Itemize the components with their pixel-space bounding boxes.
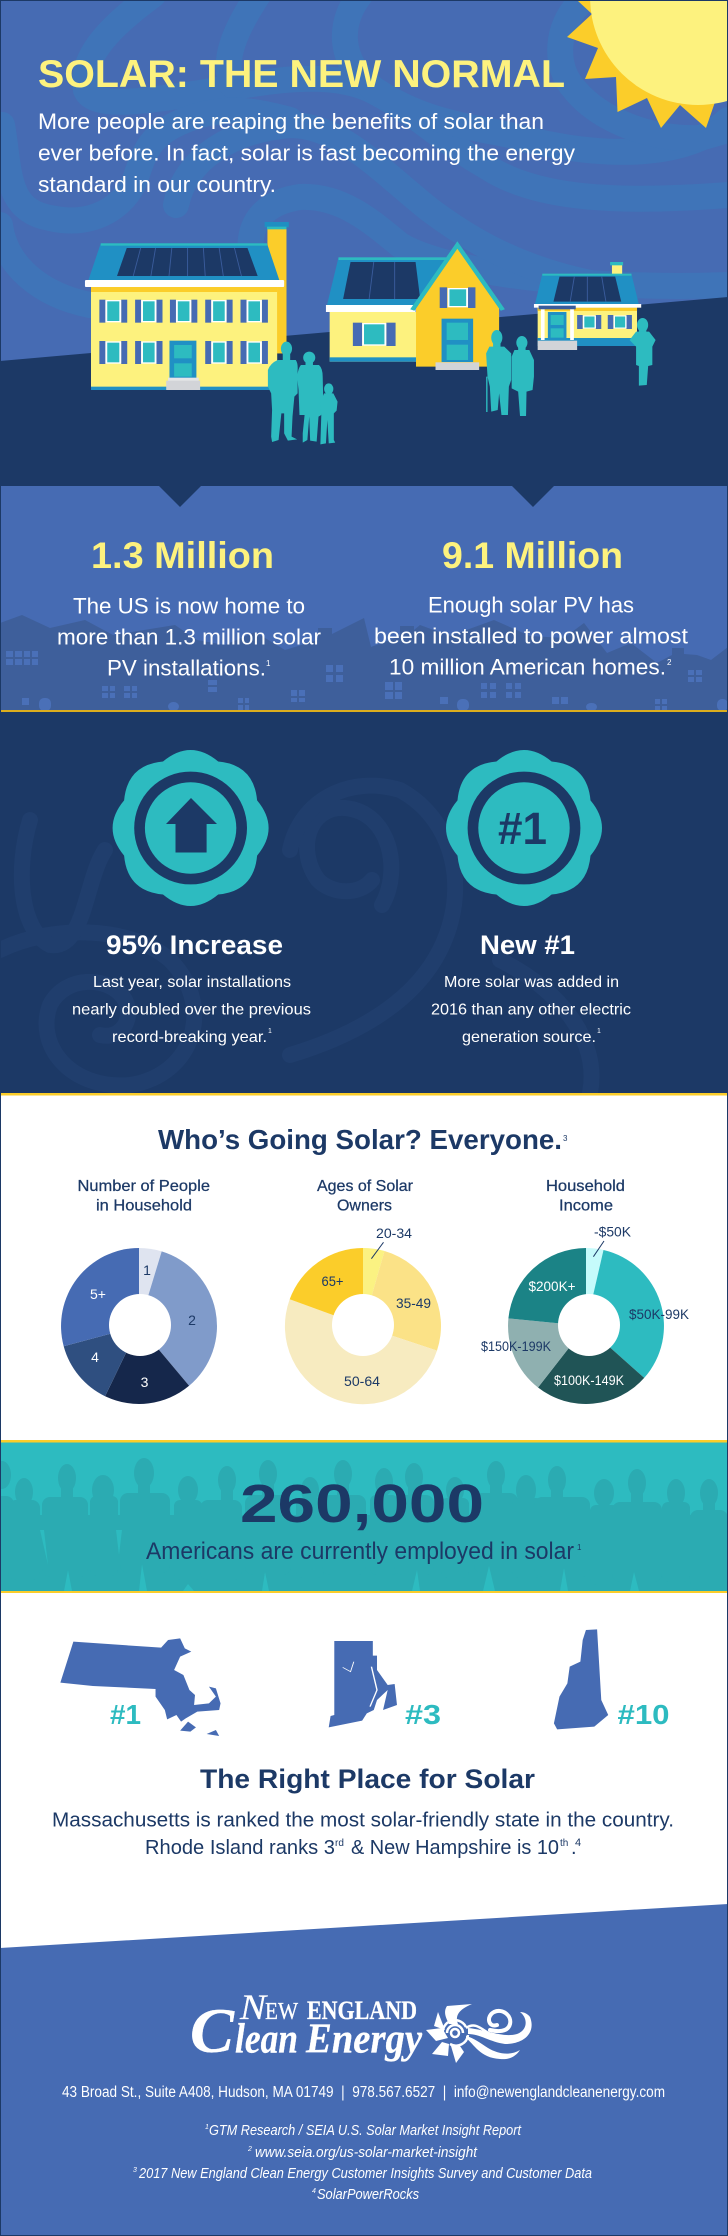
references: SolarPowerRocks bbox=[317, 2187, 419, 2203]
map: Massachusetts bbox=[60, 1638, 221, 1736]
stat: 1.3 Million: The US is now home to bbox=[73, 594, 305, 618]
illustration: houses and people bbox=[85, 222, 656, 444]
references: GTM Research / SEIA U.S. Solar Market Insight Report bbox=[209, 2123, 522, 2139]
stat: 1.3 Million: 1 bbox=[266, 659, 271, 668]
map: Rhode Island bbox=[329, 1641, 397, 1727]
text: new number one: More solar was added in bbox=[444, 974, 619, 991]
caption: Americans are currently employed in solar bbox=[146, 1538, 574, 1565]
intro text: ever before. In fact, solar is fast becoming the energy bbox=[38, 140, 576, 166]
badge: number one bbox=[446, 750, 602, 906]
stat: 9.1 Million: 10 million American homes. bbox=[389, 654, 666, 680]
map: New Hampshire bbox=[554, 1629, 608, 1729]
body text: Massachusetts is ranked the most solar-friendly state in the country. bbox=[52, 1810, 674, 1832]
people: woman bbox=[630, 318, 656, 386]
text: new number one: New #1 bbox=[480, 930, 575, 960]
gaps between figures bbox=[40, 1530, 639, 1591]
intro text: standard in our country. bbox=[38, 172, 276, 197]
crowd silhouette bbox=[0, 1458, 728, 1591]
body text: th bbox=[560, 1838, 568, 1849]
references: 2017 New England Clean Energy Customer Insights Survey and Customer Data bbox=[138, 2166, 592, 2182]
heading: The Right Place for Solar bbox=[200, 1764, 536, 1794]
references: 3 bbox=[133, 2167, 137, 2174]
donut: number of people in household: 2 bbox=[188, 1312, 196, 1328]
badge: number one: #1 bbox=[498, 803, 547, 854]
sky swirls bbox=[0, 0, 728, 305]
logo wordmark: N bbox=[239, 1987, 268, 2027]
logo wordmark: ENGLAND bbox=[307, 1996, 417, 2025]
panel: jobs band bbox=[0, 1440, 728, 1594]
donut: number of people in household: in Household bbox=[96, 1198, 192, 1214]
stat: 1.3 Million: PV installations. bbox=[107, 656, 266, 680]
body text: rd bbox=[335, 1838, 344, 1849]
donut: household income: Income bbox=[559, 1198, 613, 1214]
donut: household income: $200K+ bbox=[528, 1278, 576, 1294]
stat: 1.3 Million: more than 1.3 million solar bbox=[57, 624, 321, 650]
references: 1 bbox=[205, 2124, 209, 2131]
text: new number one: 1 bbox=[597, 1028, 601, 1035]
panel: who's going solar bbox=[0, 1093, 728, 1441]
text: 95% increase: nearly doubled over the previous bbox=[72, 1002, 311, 1018]
donut: household income: $150K-199K bbox=[481, 1338, 552, 1354]
body text: Rhode Island ranks 3 bbox=[145, 1837, 335, 1859]
rank labels: #3 bbox=[405, 1699, 441, 1730]
intro text: More people are reaping the benefits of solar than bbox=[38, 109, 544, 134]
logo wordmark: C bbox=[190, 1995, 235, 2066]
background swirls bbox=[0, 786, 592, 1093]
donut: ages of solar owners bbox=[285, 1178, 441, 1404]
skyline bbox=[0, 615, 728, 711]
house: large colonial bbox=[85, 222, 289, 390]
text: 95% increase: record-breaking year. bbox=[112, 1029, 267, 1046]
gold rules bbox=[0, 1440, 728, 1594]
people: older couple bbox=[486, 330, 534, 416]
stat: 9.1 Million: been installed to power almost bbox=[374, 624, 688, 648]
logo wordmark: lean bbox=[235, 2016, 298, 2062]
references: 4 bbox=[312, 2188, 316, 2195]
donut: ages of solar owners: 35-49 bbox=[396, 1295, 431, 1311]
body text: . bbox=[571, 1837, 577, 1859]
logo wordmark bbox=[190, 1987, 422, 2066]
sun bbox=[567, 0, 728, 128]
references: 2 bbox=[247, 2146, 252, 2153]
people: family of three bbox=[268, 342, 338, 444]
donut: number of people in household: Number of People bbox=[78, 1178, 210, 1195]
rank labels: #10 bbox=[618, 1699, 670, 1730]
donut: ages of solar owners: 20-34 bbox=[376, 1225, 412, 1241]
badge: arrow up bbox=[113, 750, 269, 906]
text: 95% increase: 95% Increase bbox=[106, 930, 283, 960]
big number: 260,000 bbox=[240, 1474, 484, 1534]
donut: number of people in household: 4 bbox=[91, 1349, 99, 1365]
panel: hero bbox=[0, 0, 728, 487]
stat: 9.1 Million: Enough solar PV has bbox=[428, 592, 634, 618]
heading footnote: 3 bbox=[563, 1134, 568, 1143]
donut: number of people in household: 5+ bbox=[90, 1286, 106, 1302]
house: gabled bbox=[326, 245, 503, 370]
text: new number one bbox=[431, 930, 631, 1046]
text: 95% increase bbox=[72, 930, 311, 1046]
stat: 9.1 Million: 9.1 Million bbox=[442, 535, 623, 576]
panel: growth highlights bbox=[0, 712, 728, 1093]
ground bbox=[0, 297, 728, 487]
donut: household income: -$50K bbox=[594, 1224, 632, 1240]
donut: ages of solar owners: 50-64 bbox=[344, 1373, 380, 1389]
donut: household income: $100K-149K bbox=[554, 1372, 625, 1388]
donut: number of people in household: 1 bbox=[143, 1262, 151, 1278]
references: www.seia.org/us-solar-market-insight bbox=[255, 2145, 478, 2161]
stat: 1.3 Million: 1.3 Million bbox=[91, 535, 274, 576]
donut: ages of solar owners: Ages of Solar bbox=[317, 1178, 414, 1195]
house: small cottage bbox=[534, 262, 641, 350]
logo wordmark: Energy bbox=[305, 2016, 422, 2062]
rank labels bbox=[110, 1699, 670, 1730]
donut: ages of solar owners: 65+ bbox=[322, 1273, 344, 1289]
panel: state rankings bbox=[0, 1593, 728, 1948]
text: 95% increase: Last year, solar installations bbox=[93, 974, 291, 991]
gold rule bbox=[0, 710, 728, 712]
intro text bbox=[38, 109, 576, 197]
donut: number of people in household: 3 bbox=[141, 1374, 149, 1390]
references bbox=[133, 2123, 592, 2203]
callout notches bbox=[159, 486, 554, 507]
caption footnote: 1 bbox=[577, 1543, 582, 1552]
rank labels: #1 bbox=[110, 1699, 141, 1730]
logo swirl mark bbox=[426, 2004, 532, 2063]
donut: household income bbox=[481, 1178, 690, 1404]
title: SOLAR: THE NEW NORMAL bbox=[38, 53, 565, 96]
text: new number one: generation source. bbox=[462, 1029, 596, 1046]
stat: 1.3 Million bbox=[57, 535, 321, 680]
text: new number one: 2016 than any other electric bbox=[431, 1002, 631, 1018]
body text: & New Hampshire is 10 bbox=[351, 1837, 559, 1859]
stat: 9.1 Million bbox=[374, 535, 688, 680]
panel: installation stats bbox=[0, 486, 728, 712]
donut: ages of solar owners: Owners bbox=[337, 1198, 392, 1214]
donut: household income: Household bbox=[546, 1178, 625, 1195]
stat: 9.1 Million: 2 bbox=[667, 658, 672, 667]
panel: footer bbox=[0, 1904, 728, 2236]
donut: household income: $50K-99K bbox=[629, 1306, 690, 1322]
logo wordmark: EW bbox=[265, 1999, 298, 2025]
body text: 4 bbox=[575, 1837, 581, 1849]
donut: number of people in household bbox=[61, 1178, 217, 1404]
heading: Who’s Going Solar? Everyone. bbox=[158, 1124, 562, 1155]
text: 95% increase: 1 bbox=[268, 1028, 272, 1035]
body text bbox=[52, 1810, 674, 1859]
